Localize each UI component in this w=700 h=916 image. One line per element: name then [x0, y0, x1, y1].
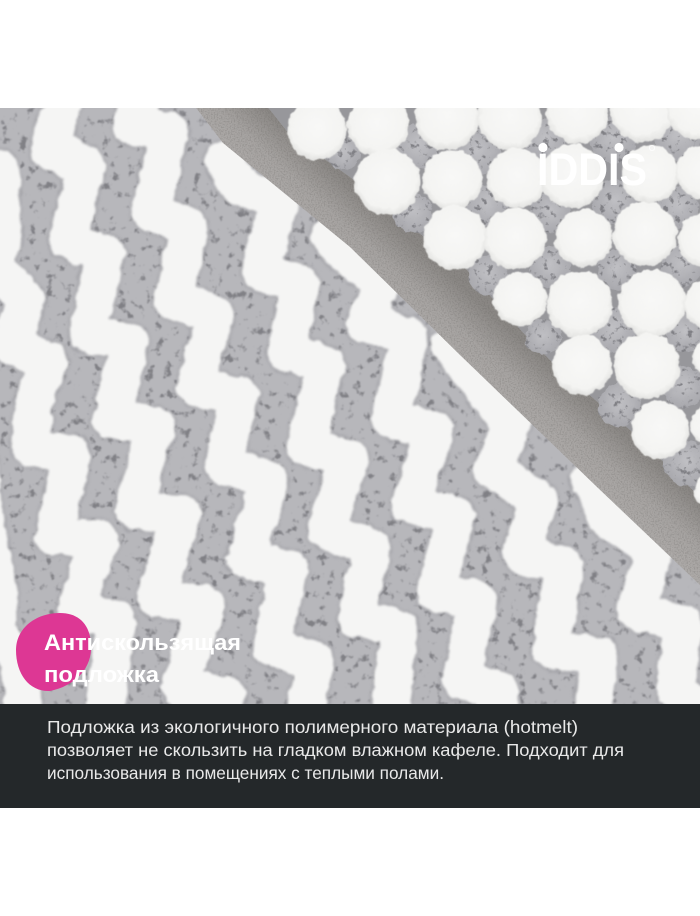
caption text: использования в помещениях с теплыми полами. [47, 763, 444, 783]
logo: IDDIS: IDDIS [537, 144, 647, 195]
infographic page [0, 108, 700, 808]
white zigzag chenille stripes [0, 95, 700, 735]
white large pom-poms [287, 78, 700, 508]
heading: anti-slip backing [44, 630, 241, 687]
grey small pom-poms [326, 114, 700, 486]
caption text: Подложка из экологичного полимерного материала (hotmelt) [47, 717, 578, 737]
caption text: позволяет не скользить на гладком влажном кафеле. Подходит для [47, 740, 624, 760]
grey mat border band and pom-pom field base [190, 100, 700, 585]
heading: anti-slip backing: подложка [44, 662, 160, 687]
dark caption bar [0, 704, 700, 808]
pink blob accent [16, 613, 91, 691]
caption text [47, 717, 624, 783]
grey chenille base [0, 108, 700, 704]
photo: bath mat close-up [0, 78, 700, 735]
heading: anti-slip backing: Антискользящая [44, 630, 241, 655]
